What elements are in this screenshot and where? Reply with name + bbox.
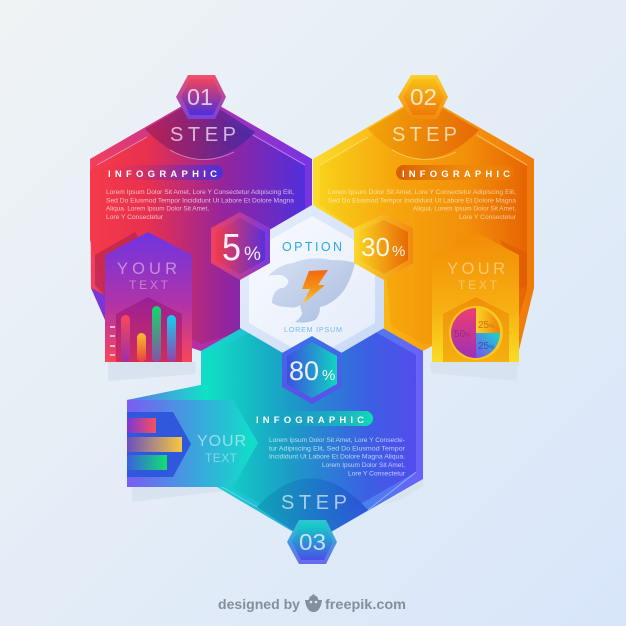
- card title: YOUR: [447, 260, 505, 278]
- heading: INFOGRAPHIC: [256, 415, 364, 426]
- heading: INFOGRAPHIC: [108, 169, 217, 180]
- heading pill: [108, 165, 223, 180]
- percent hexagon 30%: %: [392, 243, 405, 260]
- pie chart: 50%: [454, 329, 471, 340]
- chart card: your text horizontal bars: [127, 400, 258, 487]
- heading: INFOGRAPHIC: [402, 169, 510, 180]
- percent hexagon 5%: 5: [222, 227, 241, 269]
- percent hexagon 30%: 30: [361, 232, 390, 262]
- body text: [328, 189, 517, 221]
- lens highlights: [222, 472, 416, 510]
- body text: Lore Y Consectetur: [459, 214, 516, 221]
- chart card: your text bar chart: [95, 232, 192, 362]
- step badge 03: 03: [299, 529, 326, 555]
- heading pill: [255, 411, 373, 426]
- percent hexagon 30%: [354, 214, 413, 280]
- bar chart: [110, 306, 176, 362]
- body text: Lore Y Consectetur: [348, 470, 405, 478]
- purple lower-left facet: [91, 288, 106, 322]
- body text: Incididunt Ut Labore Et Dolore Magna Aliqua.: [269, 454, 405, 460]
- caption: LOREM IPSUM: [284, 325, 342, 334]
- lens highlights: [97, 135, 305, 165]
- heading pill: [396, 165, 514, 180]
- percent hexagon 80%: [282, 336, 342, 404]
- panel: step 01 hexagon: [90, 95, 312, 351]
- footer credit: [218, 594, 406, 612]
- pie chart: 25%: [478, 341, 495, 352]
- step lens: [257, 478, 368, 543]
- pie chart: 25%: [478, 320, 495, 331]
- step badge 01: 01: [187, 84, 213, 110]
- body text: [106, 189, 295, 221]
- icon: lightning bolt: [302, 270, 328, 305]
- option title: OPTION: [282, 240, 342, 254]
- footer credit: freepik.com: [325, 596, 406, 612]
- inner house: [116, 297, 182, 362]
- percent hexagon 5%: %: [244, 244, 261, 265]
- body text: Lorem Ipsum Dolor Sit Amet,: [322, 462, 405, 469]
- icon: rocket: [268, 258, 355, 323]
- percent hexagon 5%: [211, 212, 270, 280]
- lens highlights: [320, 135, 527, 165]
- body text: [269, 437, 405, 478]
- percent hexagon 80%: %: [322, 367, 335, 384]
- body text: Sed Do Eiusmod Tempor Incididunt Ut Labore Et Dolore Magna: [106, 198, 295, 204]
- step badge 02: [398, 75, 448, 119]
- chart card: your text pie chart: [432, 232, 527, 362]
- body text: tur Adipiscing Elit, Sed Do Eiusmod Tempor: [269, 446, 405, 452]
- footer credit: designed by: [218, 596, 300, 612]
- panel: step 03 hexagon: [127, 288, 423, 543]
- step badge 01: [176, 75, 226, 119]
- pie chart: [449, 306, 503, 360]
- body text: Lorem Ipsum Dolor Sit Amet, Lore Y Consectetur Adipiscing Elit,: [106, 189, 294, 196]
- card title: YOUR: [197, 433, 246, 450]
- step lens: [145, 97, 255, 159]
- drop shadows: [108, 362, 519, 505]
- body text: Lorem Ipsum Dolor Sit Amet, Lore Y Consectetur Adipiscing Elit,: [328, 189, 516, 196]
- panel: step 02 hexagon: [313, 95, 534, 351]
- connector wedge: [127, 385, 208, 400]
- step word: STEP: [281, 492, 347, 514]
- step badge 02: 02: [410, 84, 437, 110]
- inner arrow: [127, 412, 191, 477]
- body text: Lore Y Consectetur: [106, 214, 163, 221]
- percent hexagon 80%: 80: [289, 356, 319, 386]
- step lens: [368, 97, 479, 159]
- card subtitle: TEXT: [458, 278, 498, 292]
- body text: Sed Do Eiusmod Tempor Incididunt Ut Labore Et Dolore Magna: [328, 198, 517, 204]
- body text: Lorem Ipsum Dolor Sit Amet, Lore Y Consecte-: [269, 437, 405, 444]
- card subtitle: TEXT: [129, 278, 169, 292]
- card subtitle: TEXT: [205, 451, 238, 465]
- horizontal bars: [127, 418, 182, 470]
- body text: Aliqua. Lorem Ipsum Dolor Sit Amet,: [413, 206, 516, 212]
- step word: STEP: [392, 124, 457, 146]
- step word: STEP: [170, 124, 236, 146]
- step badge 03: [287, 520, 337, 564]
- panel: center option hexagon: [240, 205, 384, 370]
- icon: freepik logo: [305, 594, 322, 612]
- card title: YOUR: [117, 260, 177, 278]
- inner house: [443, 297, 509, 362]
- body text: Aliqua. Lorem Ipsum Dolor Sit Amet,: [106, 206, 209, 212]
